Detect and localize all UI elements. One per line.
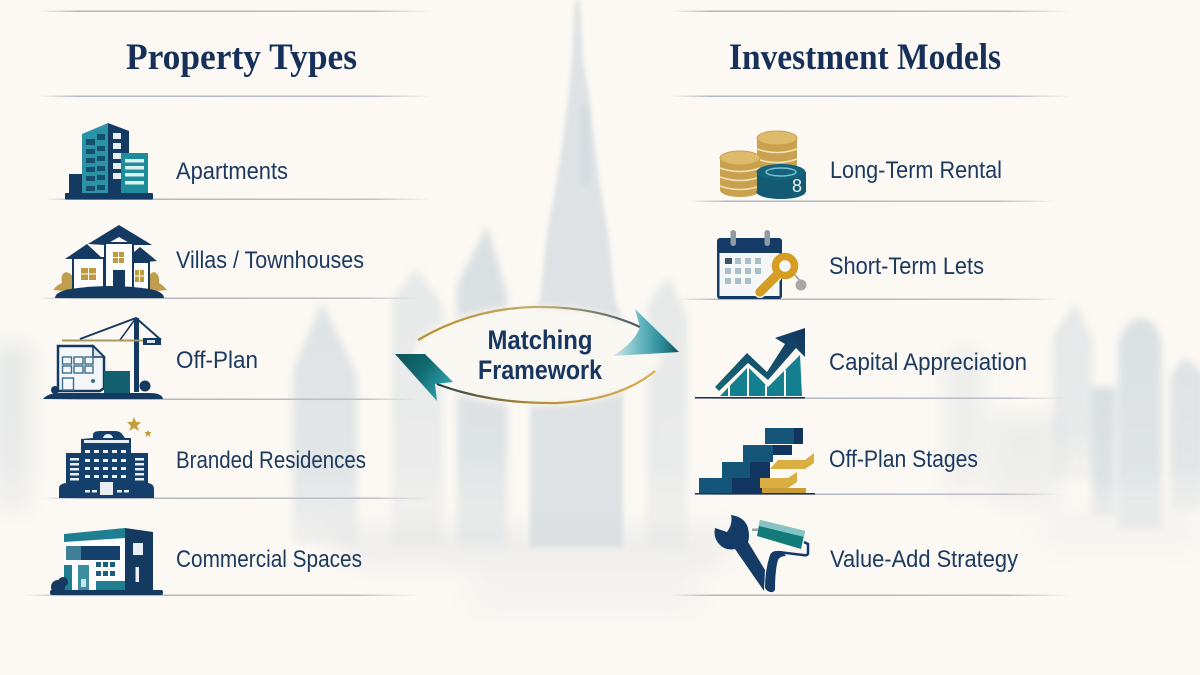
icon: stepped blocks [699, 428, 814, 493]
row: Value-Add Strategy [672, 515, 1070, 596]
heading: Property Types: Property Types [126, 37, 357, 78]
label: Off-Plan [176, 347, 258, 374]
row: Off-Plan [42, 318, 420, 400]
arrow: top arc pointing right [418, 307, 679, 356]
icon: growth arrow chart [715, 328, 805, 396]
label: Off-Plan Stages [829, 446, 978, 473]
label: Apartments [176, 158, 288, 185]
row: Branded Residences [44, 417, 430, 499]
label: Villas / Townhouses [176, 247, 364, 274]
row: Capital Appreciation [695, 328, 1065, 399]
icon: apartment tower [65, 123, 153, 200]
label: Branded Residences [176, 447, 366, 474]
icon: calendar and key [717, 230, 806, 299]
row: Off-Plan Stages [690, 428, 1060, 495]
row: Short-Term Lets [680, 230, 1060, 300]
row: Villas / Townhouses [38, 225, 420, 299]
icon: coin stacks [720, 131, 806, 199]
arrow: bottom arc pointing left [395, 354, 655, 403]
right column: investment models [672, 10, 1072, 596]
label: Framework [478, 355, 603, 385]
label: Short-Term Lets [829, 253, 984, 280]
row: Commercial Spaces [26, 528, 416, 596]
label: Capital Appreciation [829, 349, 1027, 376]
icon: coin stacks: 8 [792, 176, 802, 196]
icon: branded hotel with stars [59, 417, 154, 498]
heading: Investment Models: Investment Models [729, 37, 1001, 78]
label: Value-Add Strategy [830, 546, 1018, 573]
icon: villa [53, 225, 167, 298]
label: Commercial Spaces [176, 546, 362, 573]
label: Matching [488, 325, 592, 355]
icon: construction crane and plan [43, 318, 163, 399]
row: Apartments [45, 123, 430, 200]
icon: commercial building [50, 528, 163, 595]
label: Long-Term Rental [830, 157, 1002, 184]
center: matching framework [395, 306, 679, 406]
row: Long-Term Rental [690, 131, 1055, 202]
icon: wrench and paint roller [714, 515, 808, 592]
left column: property types [26, 10, 432, 596]
